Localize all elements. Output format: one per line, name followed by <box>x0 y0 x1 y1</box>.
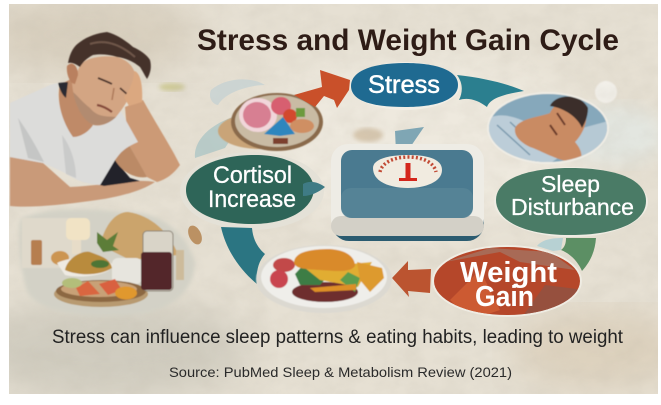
neck <box>59 75 112 137</box>
eyes and mouth <box>98 78 128 95</box>
arrow: plate to stress <box>294 70 350 108</box>
node: cortisol increase: Increase <box>208 186 296 213</box>
title: Stress and Weight Gain Cycle <box>197 24 619 57</box>
head <box>72 56 135 126</box>
glass <box>143 231 173 291</box>
node: stress <box>350 62 460 110</box>
arrow: sleep disturbance to weight gain <box>537 238 596 271</box>
node: weight gain: Weight <box>460 257 557 289</box>
arrow: burger to cortisol <box>221 227 265 284</box>
small plate <box>57 258 113 277</box>
forearm <box>125 100 180 182</box>
arrow: weight gain to burger <box>392 261 431 297</box>
left arm <box>10 157 155 207</box>
illustration: sleeping person <box>488 92 609 164</box>
hand <box>124 71 142 106</box>
scale dial <box>373 155 442 188</box>
source line: Source: PubMed Sleep & Metabolism Review (2021) <box>169 364 512 380</box>
shirt <box>10 83 138 185</box>
node: sleep disturbance: Disturbance <box>511 194 634 220</box>
large plate <box>54 281 148 307</box>
node: stress: Stress <box>368 71 440 99</box>
node: cortisol increase <box>180 152 325 230</box>
node: sleep disturbance: Sleep <box>541 171 600 197</box>
node: weight gain <box>432 245 585 320</box>
arrow: stress to sleep <box>457 75 524 107</box>
hair <box>68 32 151 79</box>
node: sleep disturbance <box>494 167 648 237</box>
decorative leaf <box>185 223 205 247</box>
illustration: food plate <box>218 93 323 151</box>
node: cortisol increase: Cortisol <box>213 162 292 189</box>
illustration: weighing scale <box>331 127 484 241</box>
illustration: stressed man <box>10 32 180 207</box>
caption: Stress can influence sleep patterns & eating habits, leading to weight <box>52 327 624 348</box>
illustration: burger plate <box>256 245 392 313</box>
node: weight gain: Gain <box>475 281 534 313</box>
illustration: food vignette <box>19 209 195 316</box>
pale swirl behind plate <box>210 79 265 105</box>
